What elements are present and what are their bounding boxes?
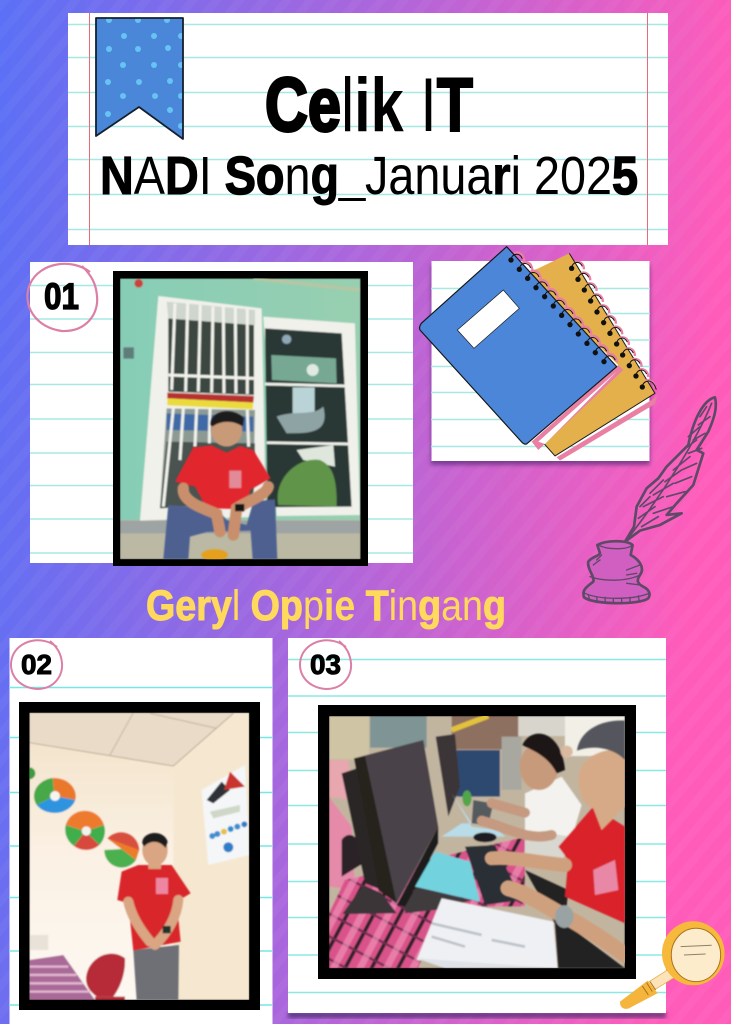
photo frame: man seated at entrance xyxy=(113,271,368,566)
icon: polka-dot bookmark xyxy=(96,17,184,139)
badge: 01: 01 xyxy=(44,276,79,317)
panel: 01 xyxy=(27,262,413,566)
person xyxy=(133,945,179,1000)
subtitle: NADI Song_Januari 2025: NADI Song_Januari 2025 xyxy=(100,146,638,206)
person xyxy=(163,499,277,559)
panel: header xyxy=(68,13,668,245)
man xyxy=(525,870,625,968)
badge: 03: 03 xyxy=(310,649,341,680)
badge: 03 xyxy=(300,640,351,689)
panel: notebooks card xyxy=(431,261,650,465)
name: Geryl Oppie Tingang: Geryl Oppie Tingang xyxy=(146,582,506,630)
spiral rings xyxy=(511,253,656,390)
icon: spiral notebooks xyxy=(420,247,657,461)
panel: 02 xyxy=(9,638,273,1024)
icon: magnifying glass xyxy=(620,921,725,1009)
title: Celik IT: Celik IT xyxy=(265,63,473,148)
badge: 01 xyxy=(27,264,97,331)
badge: 02: 02 xyxy=(21,649,52,680)
badge: 02 xyxy=(11,640,62,689)
photo frame: man standing in room xyxy=(19,702,260,1010)
woman xyxy=(525,777,582,838)
icon: quill and ink pot xyxy=(583,397,716,604)
panel: 03 xyxy=(288,638,666,1018)
photo frame: participants at computers xyxy=(318,705,636,979)
